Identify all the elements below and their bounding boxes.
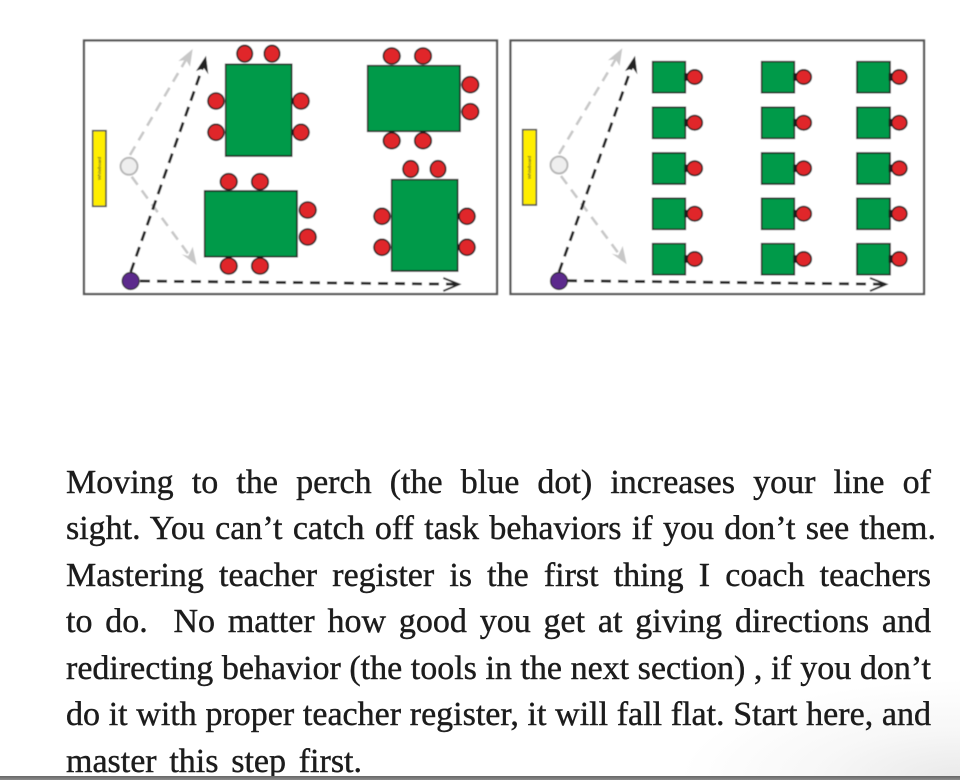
arrow: black path up	[131, 56, 208, 272]
panel frame	[84, 40, 497, 294]
table group top left	[208, 45, 309, 156]
text block: explanation paragraph: to do. No matter how good you get at giving directions and	[66, 603, 931, 640]
table group top right	[368, 48, 479, 149]
panel frame	[510, 40, 924, 294]
text block: explanation paragraph: Moving to the perch (the blue dot) increases your line of	[66, 464, 931, 501]
arrow: gray path down	[561, 176, 627, 264]
panel: rows of individual desks classroom layout	[510, 40, 924, 294]
text block: explanation paragraph: do it with proper teacher register, it will fall flat. Start here, and	[66, 696, 931, 733]
text block: explanation paragraph: Mastering teacher register is the first thing I coach teachers	[66, 556, 931, 594]
marker: gray starting position	[550, 156, 568, 174]
marker: gray starting position	[120, 158, 138, 175]
arrow: gray path up	[130, 49, 193, 155]
arrow: black path up	[559, 56, 637, 272]
table group bottom right	[374, 161, 475, 271]
desks column 2	[762, 62, 811, 275]
desks column 3	[857, 62, 907, 275]
icon: whiteboard	[93, 131, 106, 206]
arrow: gray path down	[132, 177, 197, 265]
marker: purple perch position	[550, 272, 568, 290]
icon: whiteboard: Whiteboard	[97, 156, 102, 180]
desks column 1	[653, 62, 702, 275]
arrow: black path right	[140, 278, 459, 291]
icon: whiteboard: Whiteboard	[527, 155, 532, 179]
text block: explanation paragraph: sight. You can’t catch off task behaviors if you don’t see them.	[66, 510, 936, 546]
text block: explanation paragraph: redirecting behavior (the tools in the next section) , if you don’t	[66, 650, 931, 686]
arrow: black path right	[567, 278, 886, 291]
panel: group tables classroom layout	[84, 40, 497, 294]
marker: purple perch position	[122, 272, 139, 290]
icon: whiteboard	[523, 130, 536, 205]
arrow: gray path up	[559, 48, 622, 154]
table group bottom left	[205, 174, 316, 274]
